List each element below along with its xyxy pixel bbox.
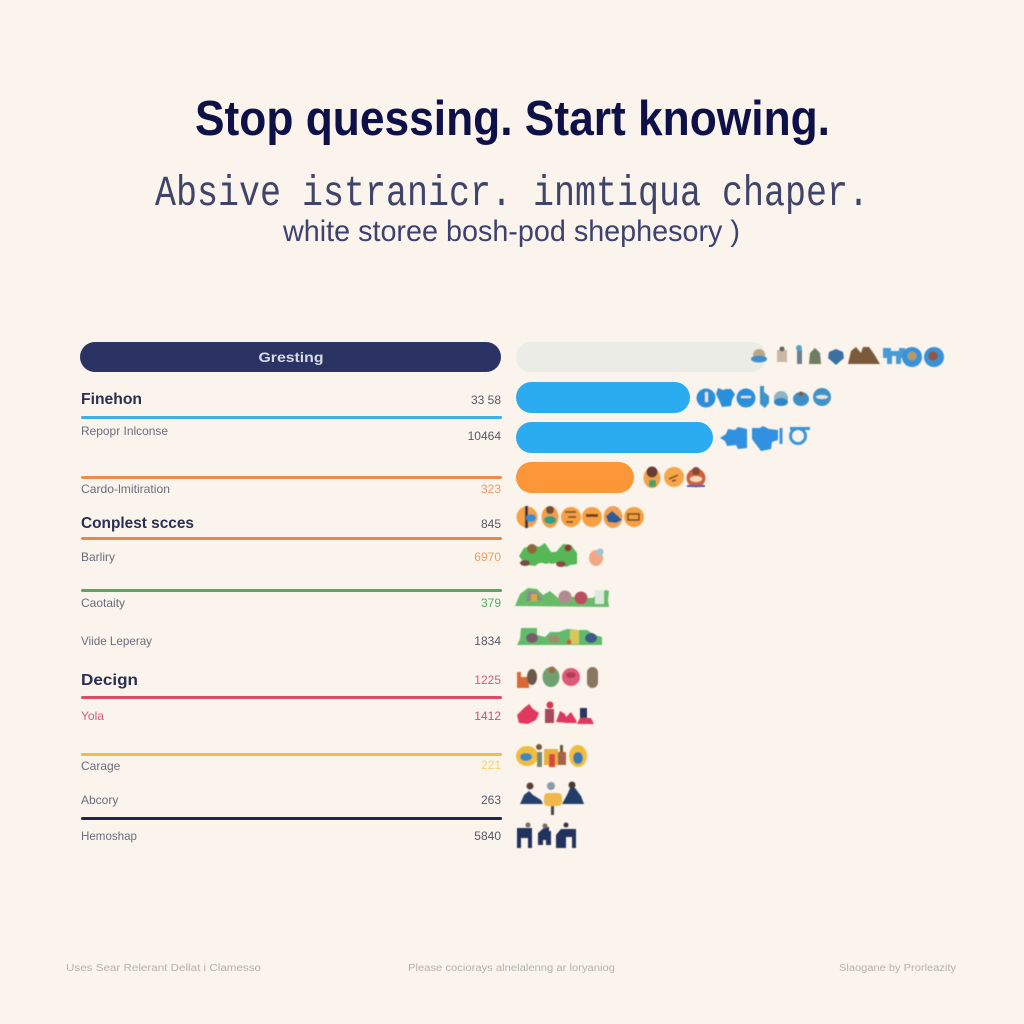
row: Cardo-lmitiration: 323 — [481, 482, 501, 496]
row: Conplest scces: Conplest scces — [81, 515, 194, 532]
row 3: blue bar with icons — [516, 422, 810, 453]
row: Caotaity — [81, 589, 502, 610]
row 12: navy icons — [520, 782, 584, 815]
row: Decign: 1225 — [474, 673, 501, 687]
row: Barliry — [81, 550, 501, 564]
row 9: mixed icons — [517, 666, 598, 688]
row: Conplest scces — [81, 515, 502, 540]
row: Finehon — [81, 391, 502, 419]
row: Repopr Inlconse: Repopr Inlconse — [81, 424, 168, 438]
row: Cardo-lmitiration: Cardo-lmitiration — [81, 482, 170, 496]
row: Repopr Inlconse — [81, 424, 501, 443]
row 2: blue bar with icons — [516, 382, 831, 413]
row: Conplest scces: 845 — [481, 517, 501, 531]
row: Barliry: 6970 — [474, 550, 501, 564]
table header pill — [80, 342, 501, 372]
row: Hemoshap: Hemoshap — [81, 829, 137, 843]
row 8: green icon cluster — [517, 628, 602, 645]
row: Cardo-lmitiration — [81, 476, 502, 496]
row: Yola — [81, 709, 501, 723]
row: Decign — [81, 672, 502, 699]
subtitle line two: white storee bosh-pod shephesory ) — [282, 215, 740, 248]
footer right note: Slaogane by Prorleazity — [839, 963, 956, 974]
row: Abcory: Abcory — [81, 793, 118, 807]
row: Carage: Carage — [81, 759, 121, 773]
row: Viide Leperay — [81, 634, 501, 648]
row: Yola: 1412 — [474, 709, 501, 723]
row: Finehon: 33 58 — [471, 393, 501, 407]
row 7: green icon cluster — [515, 588, 609, 607]
row: Carage — [81, 753, 502, 773]
row: Abcory: 263 — [481, 793, 501, 807]
footer left note: Uses Sear Relerant Dellat i Clamesso — [66, 963, 262, 974]
row: Carage: 221 — [481, 758, 501, 772]
row 1: grey bar with icons — [516, 342, 944, 372]
footer centre note: Please cociorays alnelalenng ar loryaniog — [408, 963, 615, 974]
row: Abcory — [81, 793, 502, 820]
row: Caotaity: Caotaity — [81, 596, 125, 610]
row: Yola: Yola — [81, 709, 104, 723]
row 6: green icon cluster — [519, 543, 604, 567]
panel: pictogram bars — [515, 342, 944, 848]
table header pill: Gresting — [258, 349, 324, 365]
row: Caotaity: 379 — [481, 596, 501, 610]
row 11: yellow icons — [516, 744, 587, 767]
row: Finehon: Finehon — [81, 391, 142, 408]
row 10: pink icons — [517, 702, 594, 724]
title: Stop quessing. Start knowing. — [195, 92, 830, 146]
panel: table — [80, 342, 502, 843]
row: Viide Leperay: Viide Leperay — [81, 634, 152, 648]
row 4: orange bar with icons — [516, 462, 706, 493]
row: Hemoshap — [81, 829, 501, 843]
subtitle line one: Absive istranicr. inmtiqua chaper. — [155, 169, 869, 218]
row 13: navy desk icons — [517, 822, 576, 848]
row: Decign: Decign — [81, 672, 138, 689]
row 5: orange circle icons — [516, 506, 644, 528]
row: Hemoshap: 5840 — [474, 829, 501, 843]
row: Repopr Inlconse: 10464 — [468, 429, 501, 443]
row: Barliry: Barliry — [81, 550, 115, 564]
row: Viide Leperay: 1834 — [474, 634, 501, 648]
